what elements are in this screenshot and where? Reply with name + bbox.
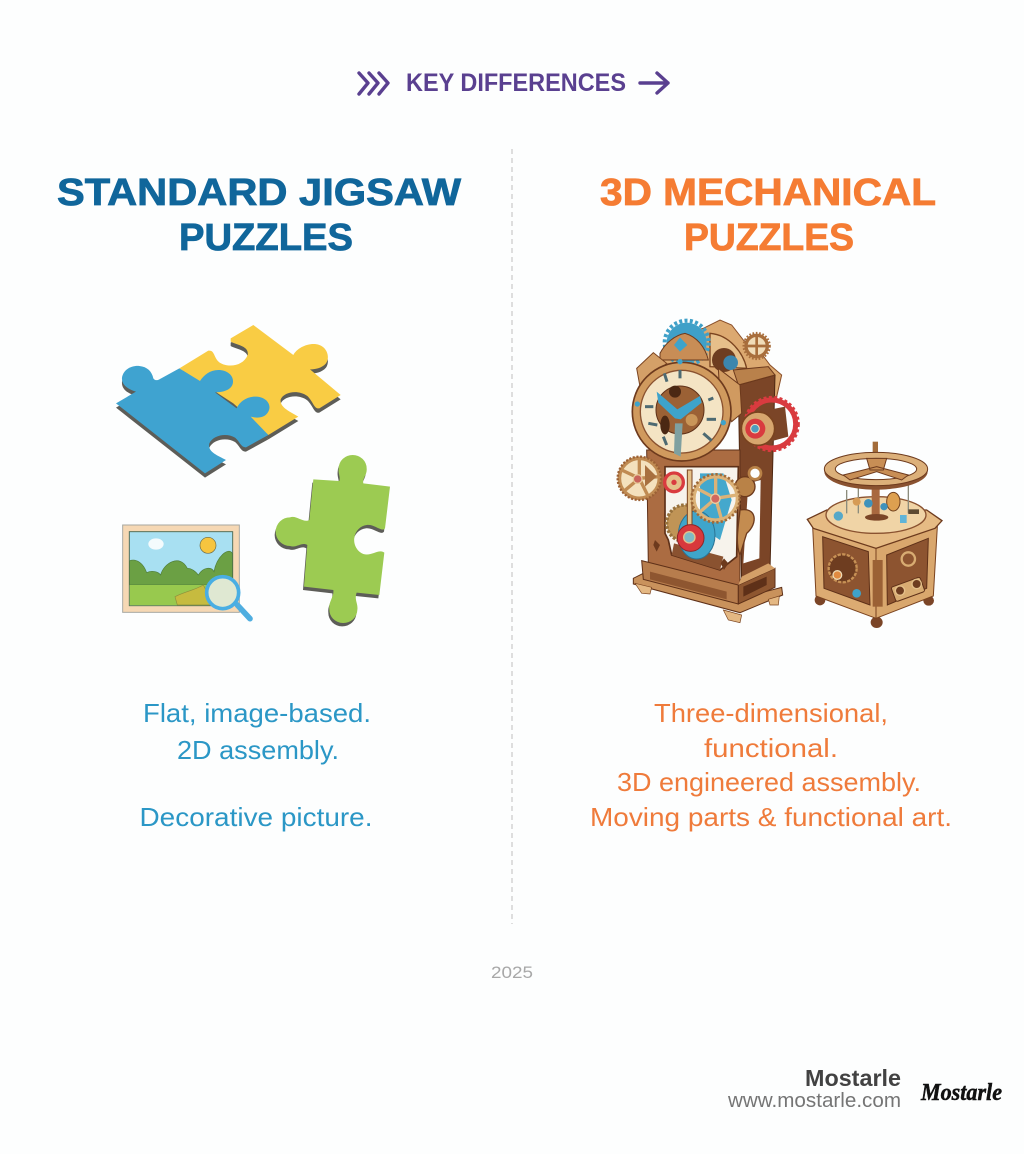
description: standard jigsaw puzzles [140, 698, 372, 832]
carousel platform [826, 497, 926, 533]
joined yellow and blue pieces [116, 325, 341, 478]
wooden clock [618, 320, 798, 623]
clock base [633, 573, 783, 613]
title: standard jigsaw puzzles [57, 172, 461, 259]
pendulum [678, 511, 715, 559]
title: 3D mechanical puzzles: 3D MECHANICAL [600, 172, 936, 214]
description: 3D mechanical puzzles: Moving parts & functional art. [590, 802, 952, 832]
icon: right arrow [640, 73, 668, 93]
music box feet [815, 595, 934, 628]
description: 3D mechanical puzzles: 3D engineered assembly. [617, 767, 921, 797]
brand logo: Mostarle [920, 1080, 1002, 1106]
section header: key differences [359, 69, 668, 97]
description: standard jigsaw puzzles: Flat, image-based. [143, 698, 371, 728]
music box right face [876, 527, 937, 618]
brand block [727, 1065, 1002, 1112]
small red gear [665, 473, 683, 492]
top right small gear [746, 335, 767, 357]
center wooden gear [694, 476, 738, 520]
magnifying glass [207, 577, 250, 619]
clock dial [632, 362, 731, 461]
year label: 2025 [491, 963, 533, 982]
title: 3D mechanical puzzles [600, 172, 936, 259]
description: 3D mechanical puzzles: functional. [704, 733, 838, 763]
blue top gear [667, 323, 707, 363]
title: 3D mechanical puzzles: PUZZLES [684, 217, 854, 259]
framed landscape picture [123, 525, 239, 612]
back gears [667, 505, 703, 542]
music box right dials [891, 577, 925, 602]
music box left face [813, 527, 876, 618]
illustration: jigsaw puzzle pieces [116, 325, 390, 626]
description: 3D mechanical puzzles: Three-dimensional, [654, 698, 888, 728]
illustration: wooden mechanical clock and music box [618, 320, 942, 628]
heading text: KEY DIFFERENCES [406, 69, 626, 97]
green puzzle piece [275, 455, 390, 626]
clock tower side [738, 375, 775, 585]
music box left gear [829, 554, 857, 582]
icon: triple chevrons [359, 73, 388, 94]
description: 3D mechanical puzzles [590, 698, 952, 832]
clock hands [657, 392, 702, 419]
carousel top ring [867, 442, 883, 467]
red right gear [748, 400, 796, 448]
carousel figures [834, 483, 919, 523]
music box lid [807, 510, 942, 548]
clock side wood panel [718, 368, 742, 422]
description: standard jigsaw puzzles: Decorative picture. [140, 802, 372, 832]
center dashed divider [511, 149, 513, 924]
brand url: www.mostarle.com [727, 1090, 901, 1112]
clock rear crest [660, 320, 782, 397]
title: standard jigsaw puzzles: STANDARD JIGSAW [57, 172, 461, 214]
brand name: Mostarle [805, 1065, 901, 1091]
title: standard jigsaw puzzles: PUZZLES [179, 217, 353, 259]
wooden music box [807, 442, 942, 628]
clock tower front [647, 450, 740, 587]
description: standard jigsaw puzzles: 2D assembly. [177, 735, 339, 765]
left wooden gear [619, 458, 659, 498]
